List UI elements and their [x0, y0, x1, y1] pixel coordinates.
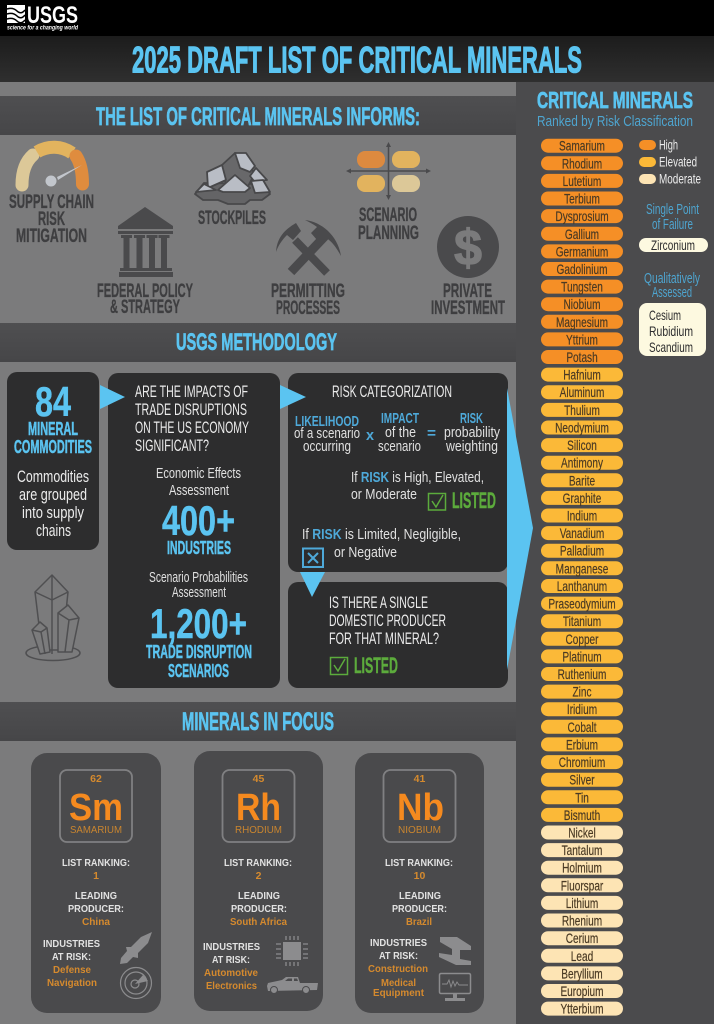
box: single domestic producer: DOMESTIC PRODUCER	[329, 611, 446, 630]
ranked list: high: Tungsten	[561, 279, 603, 295]
text: supply chain risk mitigation: RISK	[38, 209, 65, 230]
icon: risk gauge	[22, 147, 82, 186]
ranked list: high: Lutetium	[563, 173, 601, 189]
callout: qualitatively assessed: Assessed	[652, 285, 692, 301]
big right arrow	[507, 388, 533, 670]
card: samarium: 1	[93, 870, 99, 882]
ranked list: moderate: Europium	[560, 983, 604, 999]
ranked list: elevated: Palladium	[560, 543, 604, 559]
icon: scenario quadrant	[346, 142, 431, 200]
box: trade disruptions question: ARE THE IMPACTS OF	[135, 382, 248, 401]
arrow: second step	[280, 385, 306, 409]
arrow: first step	[100, 385, 125, 409]
callout: qualitatively assessed: Scandium	[649, 339, 693, 355]
box: risk categorization: weighting	[445, 439, 498, 455]
card: samarium: Sm	[69, 787, 123, 829]
heading: usgs methodology: USGS METHODOLOGY	[176, 329, 337, 356]
text: federal policy and strategy	[97, 281, 193, 318]
box: single domestic producer	[288, 582, 508, 688]
box: risk categorization: If RISK is High, Elevated,	[351, 470, 484, 486]
ranked list: high: Gadolinium	[557, 261, 607, 277]
box: trade disruptions question: TRADE DISRUPTION	[146, 642, 252, 662]
ranked list: elevated: Platinum	[562, 649, 602, 665]
box: 84 mineral commodities: MINERAL	[28, 419, 78, 439]
box: trade disruptions question: TRADE DISRUPTIONS	[135, 400, 247, 419]
ranked list: elevated: Lanthanum	[557, 578, 607, 594]
text: private investment	[431, 281, 505, 319]
ranked list: elevated: Silver	[569, 772, 595, 788]
box: trade disruptions question: 1,200+	[150, 600, 247, 647]
text: supply chain risk mitigation: MITIGATION	[16, 226, 87, 247]
card: niobium: AT RISK:	[379, 950, 418, 962]
ranked list: moderate: Beryllium	[561, 966, 603, 982]
box: risk categorization: x	[366, 427, 375, 444]
ranked list: elevated: Indium	[567, 508, 597, 524]
card: rhodium: 45	[253, 773, 264, 785]
card: rhodium: PRODUCER:	[231, 903, 287, 915]
ranked list: elevated: Chromium	[559, 754, 605, 771]
ranked list: elevated: Aluminum	[560, 385, 604, 401]
icon: medical monitor	[440, 974, 470, 1001]
ranked list: elevated: Vanadium	[560, 525, 604, 542]
card: niobium: 10	[414, 870, 425, 882]
card: rhodium: RHODIUM	[235, 825, 282, 836]
box: risk categorization: probability	[444, 425, 501, 441]
card: samarium	[31, 753, 161, 1013]
box: risk categorization: of a scenario	[294, 426, 360, 442]
box: risk categorization: If RISK is Limited, Negligible,	[302, 527, 461, 543]
panel: critical minerals column	[516, 82, 714, 1024]
panel: minerals in focus	[0, 702, 516, 1013]
text: federal policy and strategy: FEDERAL POLICY	[97, 281, 193, 302]
box: risk categorization: of the	[385, 425, 416, 441]
box: risk categorization: RISK CATEGORIZATION	[332, 382, 452, 401]
box: 84 mineral commodities	[7, 372, 99, 550]
ranked list: high: Germanium	[556, 244, 608, 260]
card: rhodium: Automotive	[204, 967, 258, 979]
text: stockpiles: STOCKPILES	[198, 208, 266, 229]
card: samarium: SAMARIUM	[70, 825, 122, 836]
callout: single point of failure	[639, 202, 708, 253]
text: permitting processes	[271, 281, 345, 319]
ranked list: elevated: Antimony	[561, 455, 604, 471]
ranked list: elevated: Erbium	[566, 737, 598, 753]
legend: risk levels: High	[659, 136, 678, 152]
icon: federal building	[118, 207, 173, 277]
ranked list: high: Rhodium	[562, 156, 602, 172]
card: niobium: Brazil	[406, 916, 432, 928]
box: 84 mineral commodities: Commodities	[17, 467, 89, 486]
box: 84 mineral commodities: 84	[35, 378, 71, 425]
card: rhodium: AT RISK:	[212, 954, 250, 966]
card: rhodium: INDUSTRIES	[203, 941, 260, 953]
text: private investment: INVESTMENT	[431, 298, 505, 319]
card: niobium: Medical	[381, 977, 416, 989]
ranked list: high: Gallium	[565, 226, 599, 242]
ranked list: elevated: Hafnium	[563, 367, 601, 383]
ranked list: moderate: Lithium	[566, 895, 598, 911]
box: trade disruptions question: 400+	[162, 497, 235, 544]
box: trade disruptions question: ON THE US ECONOMY	[135, 418, 249, 437]
box: trade disruptions question: SIGNIFICANT?	[135, 436, 209, 455]
text: scenario planning	[358, 205, 419, 244]
box: trade disruptions question: Assessment	[172, 585, 226, 601]
icon: rocket	[120, 932, 152, 964]
USGS logo	[7, 2, 78, 32]
box: 84 mineral commodities: chains	[36, 521, 71, 540]
card: niobium: Construction	[368, 963, 428, 975]
card: niobium: Equipment	[373, 987, 424, 999]
box: risk categorization: LIKELIHOOD	[295, 413, 359, 430]
icon: blue x box	[303, 548, 323, 567]
icon: steel beam	[439, 937, 471, 965]
card: samarium: China	[82, 916, 110, 928]
callout: qualitatively assessed: Cesium	[649, 307, 681, 323]
header bar	[0, 0, 714, 36]
ranked list: high: Magnesium	[556, 314, 608, 330]
box: trade disruptions question: SCENARIOS	[168, 661, 229, 681]
box: risk categorization: LISTED	[452, 488, 496, 513]
card: rhodium	[194, 751, 323, 1011]
ranked list: moderate: Holmium	[562, 860, 602, 876]
ranked list: elevated: Graphite	[563, 490, 601, 506]
callout: qualitatively assessed	[639, 271, 706, 356]
card: rhodium: Rh	[236, 787, 281, 829]
ranked list: elevated: Titanium	[563, 614, 601, 630]
ranked list: high: Potash	[566, 349, 598, 365]
ranked list: elevated	[541, 367, 623, 823]
card: samarium: AT RISK:	[52, 951, 91, 963]
box: trade disruptions question: Economic Effects	[156, 466, 241, 482]
card: niobium: LIST RANKING:	[385, 857, 453, 869]
text: scenario planning: SCENARIO	[359, 205, 417, 226]
card: samarium: Defense	[53, 964, 91, 976]
box: single domestic producer: IS THERE A SINGLE	[329, 593, 428, 612]
ranked list: elevated: Barite	[569, 473, 595, 489]
box: 84 mineral commodities: COMMODITIES	[14, 437, 92, 457]
ranked list: elevated: Tin	[575, 790, 589, 806]
card: niobium: INDUSTRIES	[370, 937, 427, 949]
ranked list: high	[541, 138, 623, 365]
box: trade disruptions question: Assessment	[169, 483, 229, 499]
callout: qualitatively assessed: Rubidium	[649, 323, 693, 339]
box: single domestic producer: FOR THAT MINERAL?	[329, 629, 439, 648]
card: samarium: PRODUCER:	[68, 903, 124, 915]
ranked list: moderate: Tantalum	[562, 842, 602, 859]
ranked list: high: Terbium	[564, 191, 600, 207]
icon: pickup truck	[267, 977, 318, 994]
USGS logo: science for a changing world	[7, 26, 78, 32]
card: samarium: 62	[90, 773, 102, 785]
ranked list: elevated: Thulium	[564, 402, 600, 418]
arrow: down to producer question	[300, 572, 325, 597]
text: supply chain risk mitigation: SUPPLY CHAIN	[9, 192, 94, 213]
box: trade disruptions question: INDUSTRIES	[167, 538, 231, 558]
card: samarium: LEADING	[75, 890, 117, 902]
ranked list: elevated: Iridium	[567, 702, 597, 718]
ranked list: high: Niobium	[564, 297, 600, 313]
card: niobium: PRODUCER:	[392, 903, 447, 915]
box: risk categorization: RISK	[460, 410, 483, 427]
icon: dollar coin	[437, 216, 499, 278]
box: trade disruptions question: Scenario Probabilities	[149, 570, 248, 586]
box: risk categorization: or Negative	[334, 545, 397, 561]
ranked list: elevated: Praseodymium	[548, 596, 616, 612]
ranked list: elevated: Bismuth	[564, 807, 600, 823]
card: niobium: NIOBIUM	[398, 825, 441, 836]
icon: stockpile rocks	[195, 153, 270, 204]
ranked list: moderate: Fluorspar	[561, 878, 603, 894]
USGS logo: USGS	[27, 2, 78, 29]
heading: minerals in focus: MINERALS IN FOCUS	[182, 708, 334, 736]
box: risk categorization: or Moderate	[351, 487, 417, 503]
ranked list: elevated: Cobalt	[567, 719, 597, 735]
box: risk categorization: IMPACT	[381, 410, 419, 427]
card: niobium: LEADING	[399, 890, 441, 902]
box: risk categorization: occurring	[303, 439, 351, 455]
ranked list: high: Samarium	[559, 138, 605, 154]
ranked list: elevated: Silicon	[567, 437, 597, 454]
ranked list: moderate	[541, 825, 623, 1017]
ranked list: elevated: Manganese	[556, 561, 608, 577]
card: rhodium: 2	[256, 870, 262, 882]
text: federal policy and strategy: & STRATEGY	[110, 297, 180, 318]
box: risk categorization: scenario	[378, 439, 421, 455]
ranked list: elevated: Zinc	[572, 684, 592, 700]
card: samarium: Navigation	[47, 977, 97, 989]
card: niobium: 41	[414, 773, 425, 785]
card: rhodium: LEADING	[238, 890, 280, 902]
ranked list: moderate: Nickel	[568, 825, 596, 841]
icon: dollar coin: $	[454, 220, 482, 276]
card: niobium	[355, 753, 484, 1013]
ranked list: high: Yttrium	[566, 332, 598, 348]
text: permitting processes: PERMITTING	[271, 281, 345, 302]
box: risk categorization: =	[427, 425, 436, 442]
text: private investment: PRIVATE	[443, 281, 492, 302]
legend: risk levels: Elevated	[659, 154, 697, 170]
icon: chip	[276, 936, 308, 966]
panel: methodology	[0, 323, 516, 688]
card: rhodium: LIST RANKING:	[224, 857, 292, 869]
ranked list: moderate: Ytterbium	[560, 1001, 604, 1017]
box: risk categorization	[288, 373, 508, 572]
heading: the list of critical minerals informs: THE LIST OF CRITICAL MINERALS INFORMS:	[96, 103, 420, 131]
callout: single point of failure: Zirconium	[651, 237, 695, 253]
card: samarium: LIST RANKING:	[62, 857, 130, 869]
ranked list: moderate: Lead	[571, 948, 593, 964]
text: scenario planning: PLANNING	[358, 223, 419, 244]
card: samarium: INDUSTRIES	[43, 938, 100, 950]
icon: radar	[120, 968, 152, 998]
text: supply chain risk mitigation	[9, 192, 94, 247]
ranked list: elevated: Neodymium	[555, 420, 609, 436]
box: trade disruptions question	[108, 373, 280, 688]
callout: single point of failure: of Failure	[652, 217, 693, 233]
icon: crystal	[26, 575, 80, 660]
ranked list: elevated: Copper	[565, 631, 599, 647]
icon: green check two	[330, 658, 348, 674]
box: 84 mineral commodities: into supply	[22, 503, 84, 522]
ranked list: high: Dysprosium	[555, 208, 609, 225]
card: rhodium: South Africa	[230, 916, 287, 928]
card: niobium: Nb	[397, 787, 444, 829]
text: permitting processes: PROCESSES	[276, 298, 340, 319]
ranked list: moderate: Rhenium	[562, 913, 602, 929]
icon: crossed hammers	[276, 220, 341, 273]
card: rhodium: Electronics	[206, 980, 257, 992]
ranked list: moderate: Cerium	[566, 931, 598, 947]
box: single domestic producer: LISTED	[354, 653, 398, 678]
legend: risk levels	[639, 136, 701, 186]
panel: the list informs	[0, 96, 516, 319]
box: 84 mineral commodities: are grouped	[19, 485, 87, 504]
icon: green check	[428, 494, 446, 510]
ranked list: elevated: Ruthenium	[558, 666, 606, 682]
